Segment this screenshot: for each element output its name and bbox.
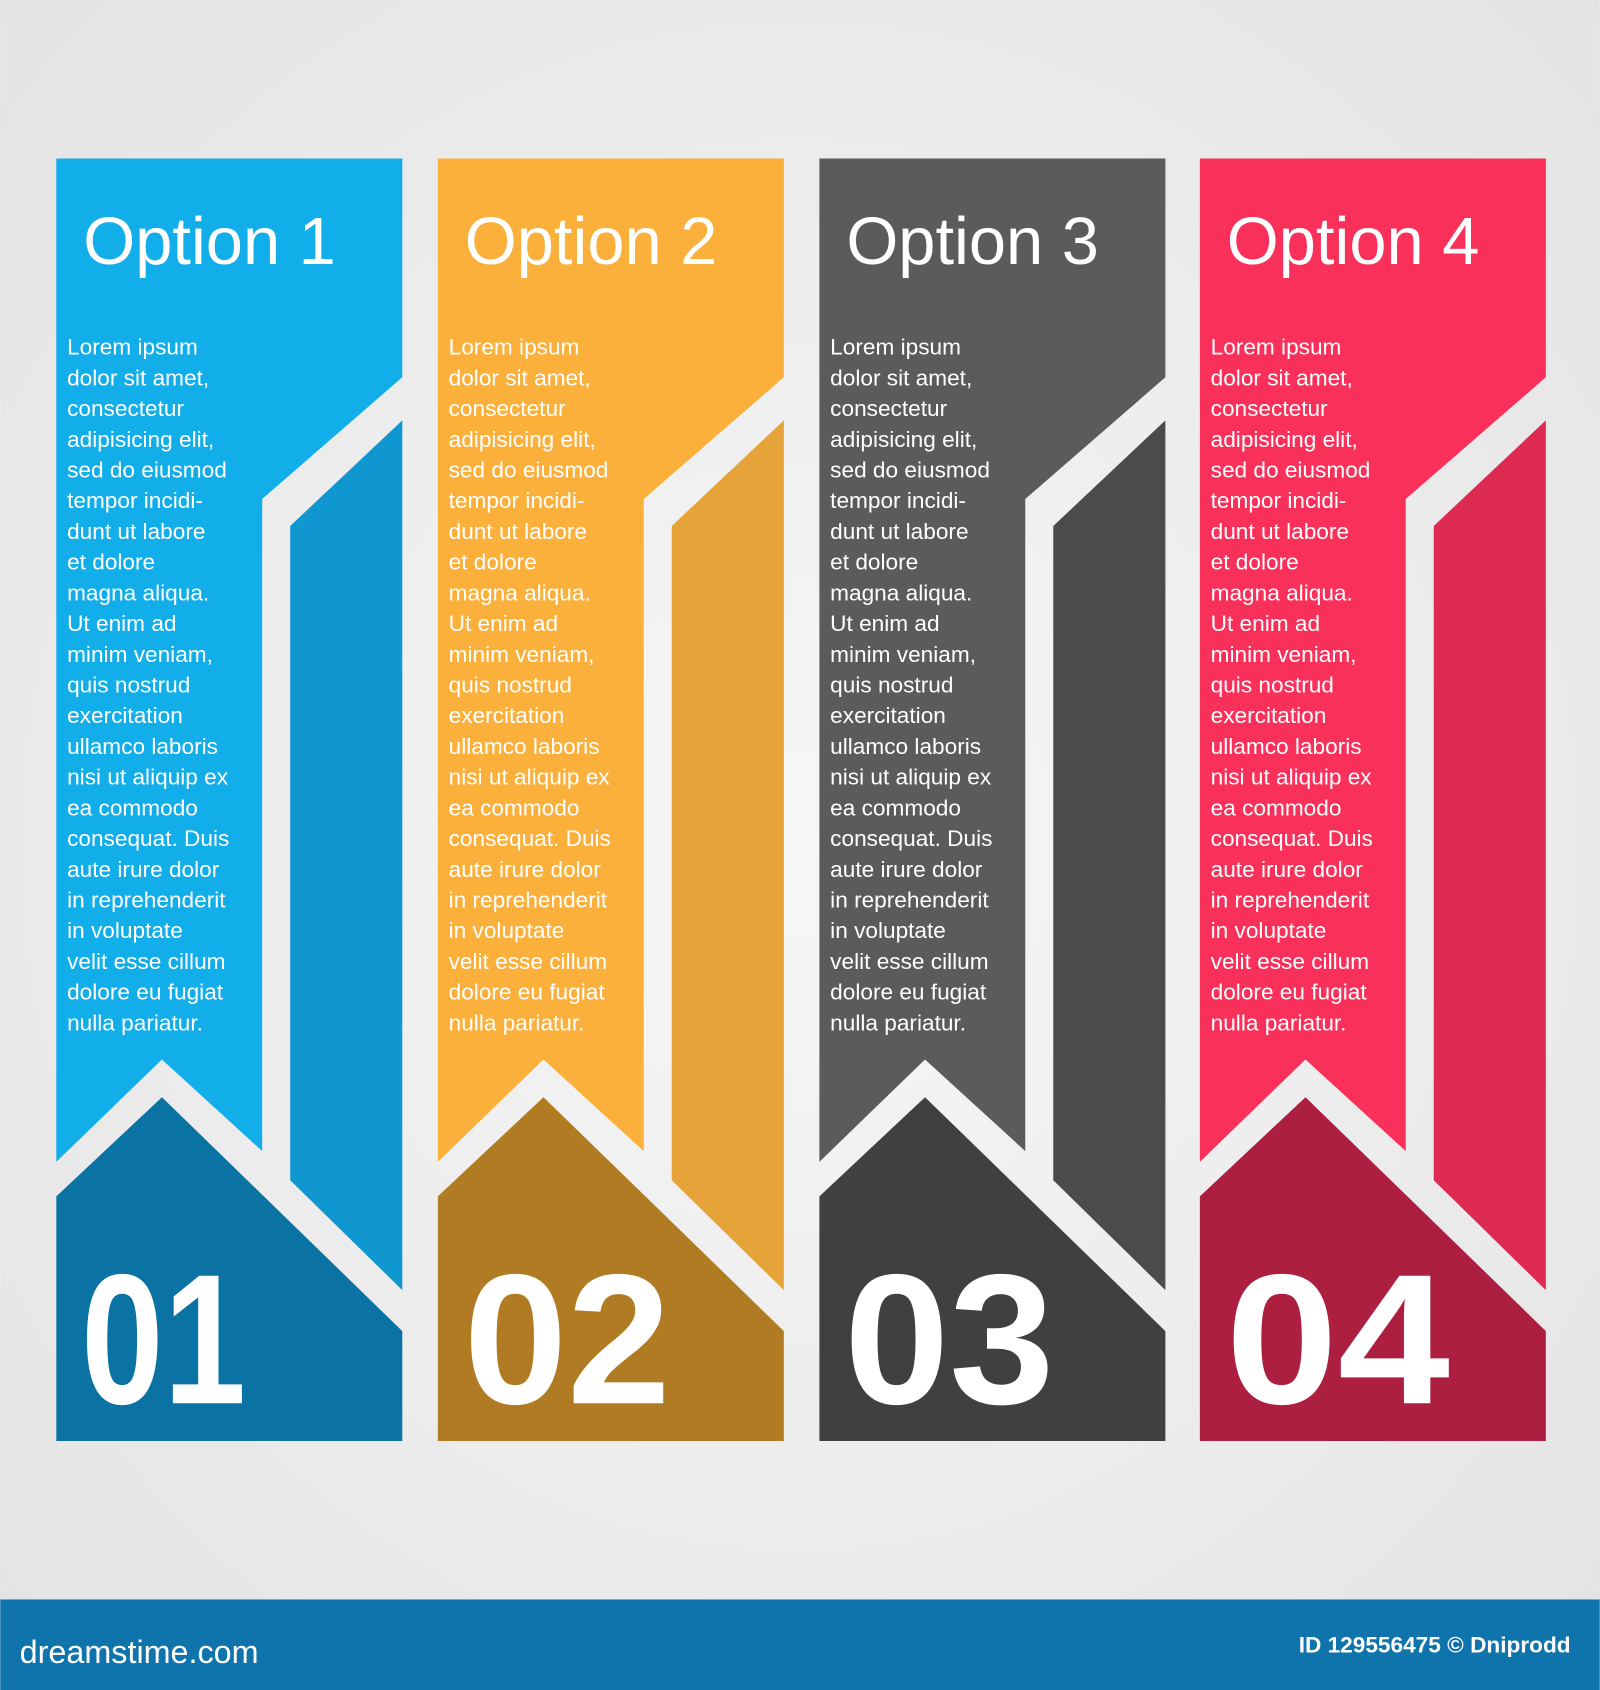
heading: Option 3 [846, 205, 1099, 279]
panel: option 4 [1200, 158, 1546, 1443]
footer credit: ID 129556475 © Dniprodd [1299, 1632, 1571, 1657]
number: 02 [464, 1236, 671, 1443]
panel: option 2 [438, 158, 784, 1443]
panel: option 1 [56, 158, 402, 1443]
number: 03 [844, 1236, 1054, 1443]
text block [830, 335, 992, 1035]
number: 01 [81, 1236, 246, 1443]
heading: Option 1 [83, 205, 336, 279]
footer bar [0, 1599, 1600, 1690]
footer logo text: dreamstime.com [20, 1634, 259, 1670]
text block [67, 335, 229, 1035]
heading: Option 4 [1227, 205, 1479, 279]
heading: Option 2 [465, 205, 717, 279]
number: 04 [1226, 1236, 1450, 1443]
text block [1211, 335, 1373, 1035]
text block [449, 335, 611, 1035]
panel: option 3 [819, 158, 1165, 1443]
